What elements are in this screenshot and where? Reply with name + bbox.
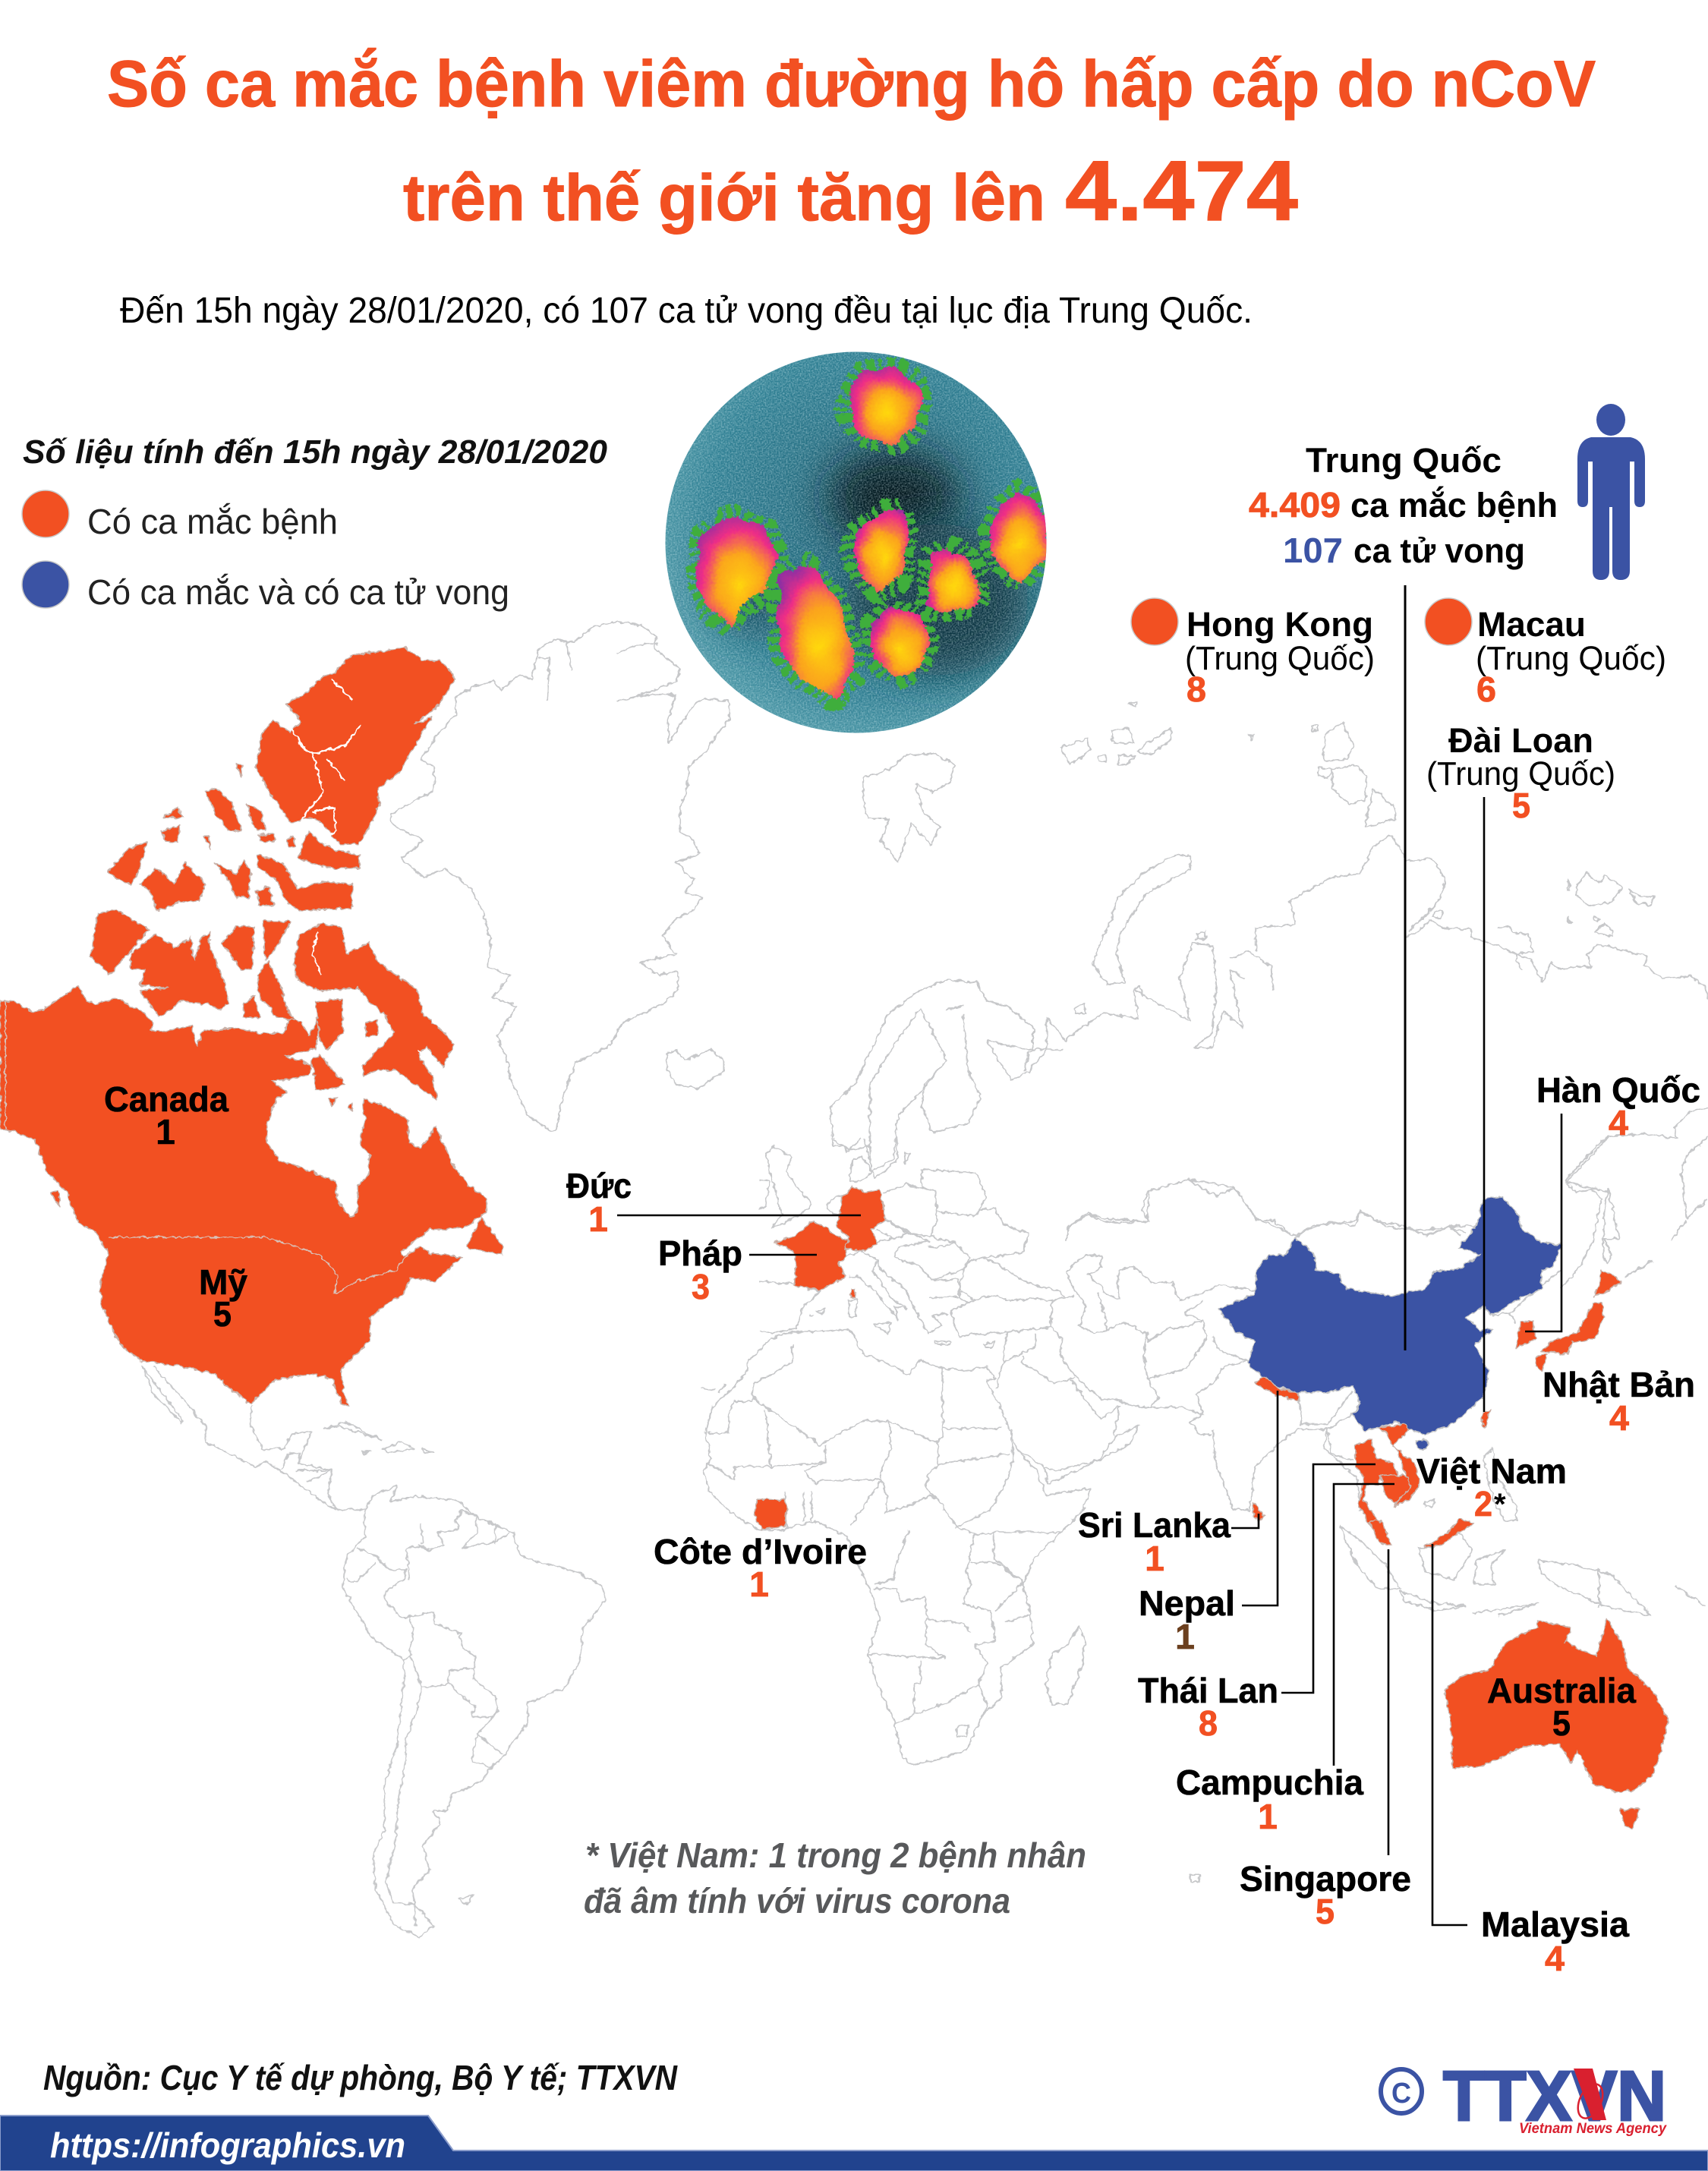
label: Nepal: Nepal [1139,1583,1235,1623]
label: Hong Kong: (Trung Quốc) [1185,640,1375,677]
logo: TTXVN: Vietnam News Agency [1519,2121,1667,2137]
label: Thái Lan [1138,1671,1278,1743]
label: Mỹ: 5 [213,1294,232,1334]
label: Malaysia: 4 [1545,1939,1565,1978]
map: Mexico, Central and South America [143,1366,606,1937]
label: Hong Kong: 8 [1186,670,1206,709]
label: Mỹ [199,1262,247,1334]
label: Macau [1425,598,1666,709]
leader line: Đức [617,1215,861,1216]
label: Hong Kong: Hong Kong [1186,605,1373,644]
map: China (blue) [1218,1197,1561,1449]
logo: TTXVN: TTXVN [1443,2056,1666,2135]
label: Nhật Bản: Nhật Bản [1543,1365,1695,1404]
label: Macau: Macau [1477,605,1586,644]
label: Pháp: 3 [692,1267,710,1306]
icon: person [1577,404,1645,580]
label: Côte d'Ivoire: 1 [749,1564,769,1604]
footnote: * Việt Nam: 1 trong 2 bệnh nhân [585,1835,1086,1875]
label: Việt Nam [1417,1451,1567,1523]
leader line: Đài Loan [1483,797,1485,1412]
map: Siberia, Far East, Kamchatka [1404,859,1708,1288]
leader line: China [1404,585,1406,1350]
title: 4.474 [1065,143,1298,238]
footnote: đã âm tính với virus corona [584,1881,1010,1920]
label: Đức: Đức [566,1166,632,1205]
label: Pháp: Pháp [658,1234,742,1273]
label: Việt Nam: 2 [1474,1484,1492,1523]
label: Sri Lanka: 1 [1145,1539,1164,1578]
China callout: ca tử vong [1353,531,1525,570]
leader line: Pháp [749,1254,817,1256]
title: trên thế giới tăng lên [403,162,1045,235]
leader line: Malaysia [1432,1544,1467,1925]
label: Hàn Quốc [1536,1070,1700,1142]
label: Singapore: Singapore [1240,1859,1411,1898]
label: Đài Loan: Đài Loan [1448,721,1593,760]
leader line: Nepal [1242,1391,1278,1605]
label: Sri Lanka [1078,1505,1231,1578]
legend [22,433,608,612]
label: Nepal: 1 [1175,1617,1195,1656]
label: Canada: 1 [156,1112,175,1152]
map: Africa and Madagascar [701,1329,1139,1765]
map: highlighted countries (orange) North America [0,648,503,1406]
label: Thái Lan: 8 [1199,1703,1218,1743]
world map [0,622,1708,1937]
label: Macau: 6 [1476,670,1496,709]
source: Nguồn: Cục Y tế dự phòng, Bộ Y tế; TTXVN [43,2058,678,2097]
label: Campuchia: 1 [1258,1797,1278,1836]
label: Macau: (Trung Quốc) [1476,640,1666,677]
China callout: ca mắc bệnh [1350,486,1558,525]
map: highlighted countries (orange) Asia and Australia [1253,1269,1669,1829]
label: Đức: 1 [588,1199,608,1239]
label: Đài Loan: 5 [1512,786,1530,825]
label: Nhật Bản: 4 [1609,1398,1629,1438]
label: Hàn Quốc: 4 [1609,1103,1628,1142]
legend item: has cases [22,490,338,541]
footer url: https://infographics.vn [50,2125,405,2165]
label: Canada [104,1079,228,1152]
label: Canada: Canada [104,1079,228,1119]
coronavirus micrograph [660,345,1055,740]
map: Northern Russia and Arctic islands [1025,701,1609,1241]
label: Hong Kong [1131,598,1375,709]
label: Đức [566,1166,632,1239]
label: Malaysia [1481,1905,1629,1978]
label: Côte d'Ivoire: Côte d’Ivoire [654,1532,867,1571]
legend item: has cases: Có ca mắc bệnh [87,502,338,541]
label: Australia: Australia [1487,1671,1636,1710]
map: white inlets across Ellesmere and Baffin [285,679,434,1076]
label: Nepal [1139,1583,1235,1656]
leader line: Campuchia [1334,1484,1394,1766]
footer band [0,2116,1708,2171]
label: Malaysia: Malaysia [1481,1905,1629,1944]
legend heading: Số liệu tính đến 15h ngày 28/01/2020 [23,433,608,471]
label: Thái Lan: Thái Lan [1138,1671,1278,1710]
label: Nhật Bản [1543,1365,1695,1438]
China callout: 4.409 [1249,485,1341,525]
title: Số ca mắc bệnh viêm đường hô hấp cấp do nCoV [107,48,1596,121]
subtitle: Đến 15h ngày 28/01/2020, có 107 ca tử vong đều tại lục địa Trung Quốc. [120,291,1253,331]
label: Côte d'Ivoire [654,1532,867,1604]
logo: TTXVN: C [1391,2078,1411,2110]
label: Singapore [1240,1859,1411,1931]
label: Hàn Quốc: Hàn Quốc [1536,1070,1700,1110]
map: France, Germany, Côte d'Ivoire [755,1186,885,1530]
China callout: Trung Quốc [1306,441,1502,480]
label: Campuchia [1176,1763,1363,1836]
map: Europe, Middle East, Central Asia [759,1139,1290,1435]
title [107,48,1596,238]
legend item: cases and deaths [22,561,509,612]
leader line: Singapore [1388,1549,1389,1855]
legend item: cases and deaths: Có ca mắc và có ca tử vong [87,572,509,612]
label: Việt Nam: * [1494,1488,1506,1521]
leader line: Hàn Quốc [1525,1114,1561,1331]
leader line: Thái Lan [1281,1464,1376,1693]
label: Sri Lanka: Sri Lanka [1078,1505,1231,1545]
label: Australia [1487,1671,1636,1743]
label: Singapore: 5 [1316,1892,1335,1931]
China callout: 107 [1283,531,1343,570]
label: Đài Loan [1426,721,1615,825]
label: Campuchia: Campuchia [1176,1763,1363,1802]
label: Pháp [658,1234,742,1306]
map: Greenland, Iceland, Svalbard, Scandinavia [390,622,1063,1171]
footnote [584,1835,1086,1920]
label: Đài Loan: (Trung Quốc) [1426,755,1615,792]
China callout [1249,441,1558,570]
leader line: Sri Lanka [1231,1514,1259,1528]
map: South and Southeast Asia, Indonesia, New Guinea [1190,1182,1705,1882]
label: Việt Nam: Việt Nam [1417,1451,1567,1491]
label: Mỹ: Mỹ [199,1262,247,1302]
label: Australia: 5 [1552,1703,1571,1743]
